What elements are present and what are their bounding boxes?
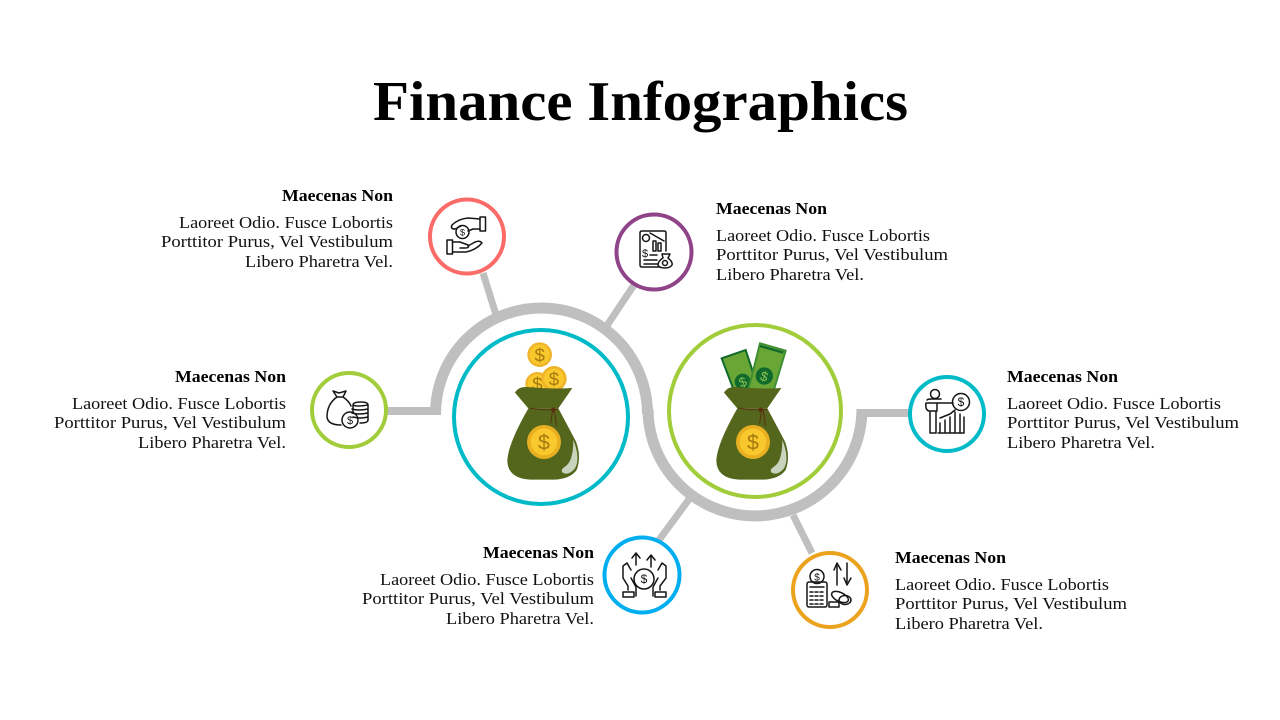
node: purple report [616, 214, 692, 290]
text block: middle right: Laoreet Odio. Fusce Lobortis [1007, 394, 1221, 413]
text block: middle right [1007, 367, 1239, 452]
text block: bottom right: Libero Pharetra Vel. [895, 614, 1043, 633]
icon: person with growth chart: $ [958, 395, 965, 409]
icon: money bag with coins [507, 342, 579, 480]
icon: hands with rising coin: $ [641, 572, 648, 586]
text block: top right: Libero Pharetra Vel. [716, 265, 864, 284]
node: red hands [430, 200, 504, 274]
node: lime coins [312, 373, 386, 447]
title: Finance Infographics [373, 71, 908, 133]
text block: bottom right: Porttitor Purus, Vel Vestibulum [895, 594, 1127, 613]
text block: bottom left: Laoreet Odio. Fusce Lobortis [380, 570, 594, 589]
text block: middle left [54, 367, 286, 452]
icon: money bag with banknotes: $ [737, 374, 749, 390]
text block: top right: Maecenas Non [716, 199, 827, 218]
main circle: cash bag [669, 325, 841, 497]
icon: hands exchanging coin: $ [460, 228, 465, 238]
text block: top right: Porttitor Purus, Vel Vestibulum [716, 245, 948, 264]
text block: bottom right: Maecenas Non [895, 548, 1006, 567]
text block: middle right: Maecenas Non [1007, 367, 1118, 386]
text block: middle left: Maecenas Non [175, 367, 286, 386]
text block: middle right: Porttitor Purus, Vel Vestibulum [1007, 413, 1239, 432]
text block: top left: Libero Pharetra Vel. [245, 252, 393, 271]
text block: top left [161, 186, 393, 271]
icon: money bag with coins: $ [549, 368, 560, 389]
text block: top left: Laoreet Odio. Fusce Lobortis [179, 213, 393, 232]
node: blue growth [604, 538, 680, 612]
text block: bottom left: Porttitor Purus, Vel Vestibulum [362, 589, 594, 608]
text block: middle right: Libero Pharetra Vel. [1007, 433, 1155, 452]
icon: money bag with banknotes: $ [758, 368, 771, 385]
icon: money bag with coins: $ [534, 344, 545, 365]
text block: bottom left: Libero Pharetra Vel. [446, 609, 594, 628]
node: teal growth [910, 377, 984, 451]
text block: top right: Laoreet Odio. Fusce Lobortis [716, 226, 930, 245]
node: orange calculator [793, 553, 867, 627]
icon: money bag with coins: $ [532, 374, 543, 395]
text block: bottom left [362, 543, 594, 628]
text block: bottom right: Laoreet Odio. Fusce Lobortis [895, 575, 1109, 594]
S-shaped connector [387, 273, 909, 553]
main circle: coin bag [454, 330, 628, 504]
icon: financial report: $ [642, 248, 648, 260]
text block: middle left: Porttitor Purus, Vel Vestibulum [54, 413, 286, 432]
icon: money bag with coins: $ [538, 431, 550, 455]
text block: bottom left: Maecenas Non [483, 543, 594, 562]
text block: top left: Maecenas Non [282, 186, 393, 205]
text block: middle left: Laoreet Odio. Fusce Lobortis [72, 394, 286, 413]
icon: money bag and coin stack: $ [347, 415, 353, 427]
icon: calculator and coins: $ [814, 572, 820, 584]
text block: middle left: Libero Pharetra Vel. [138, 433, 286, 452]
text block: top right [716, 199, 948, 284]
icon: money bag with banknotes: $ [747, 431, 759, 455]
text block: bottom right [895, 548, 1127, 633]
icon: money bag with banknotes [716, 343, 788, 480]
text block: top left: Porttitor Purus, Vel Vestibulum [161, 232, 393, 251]
